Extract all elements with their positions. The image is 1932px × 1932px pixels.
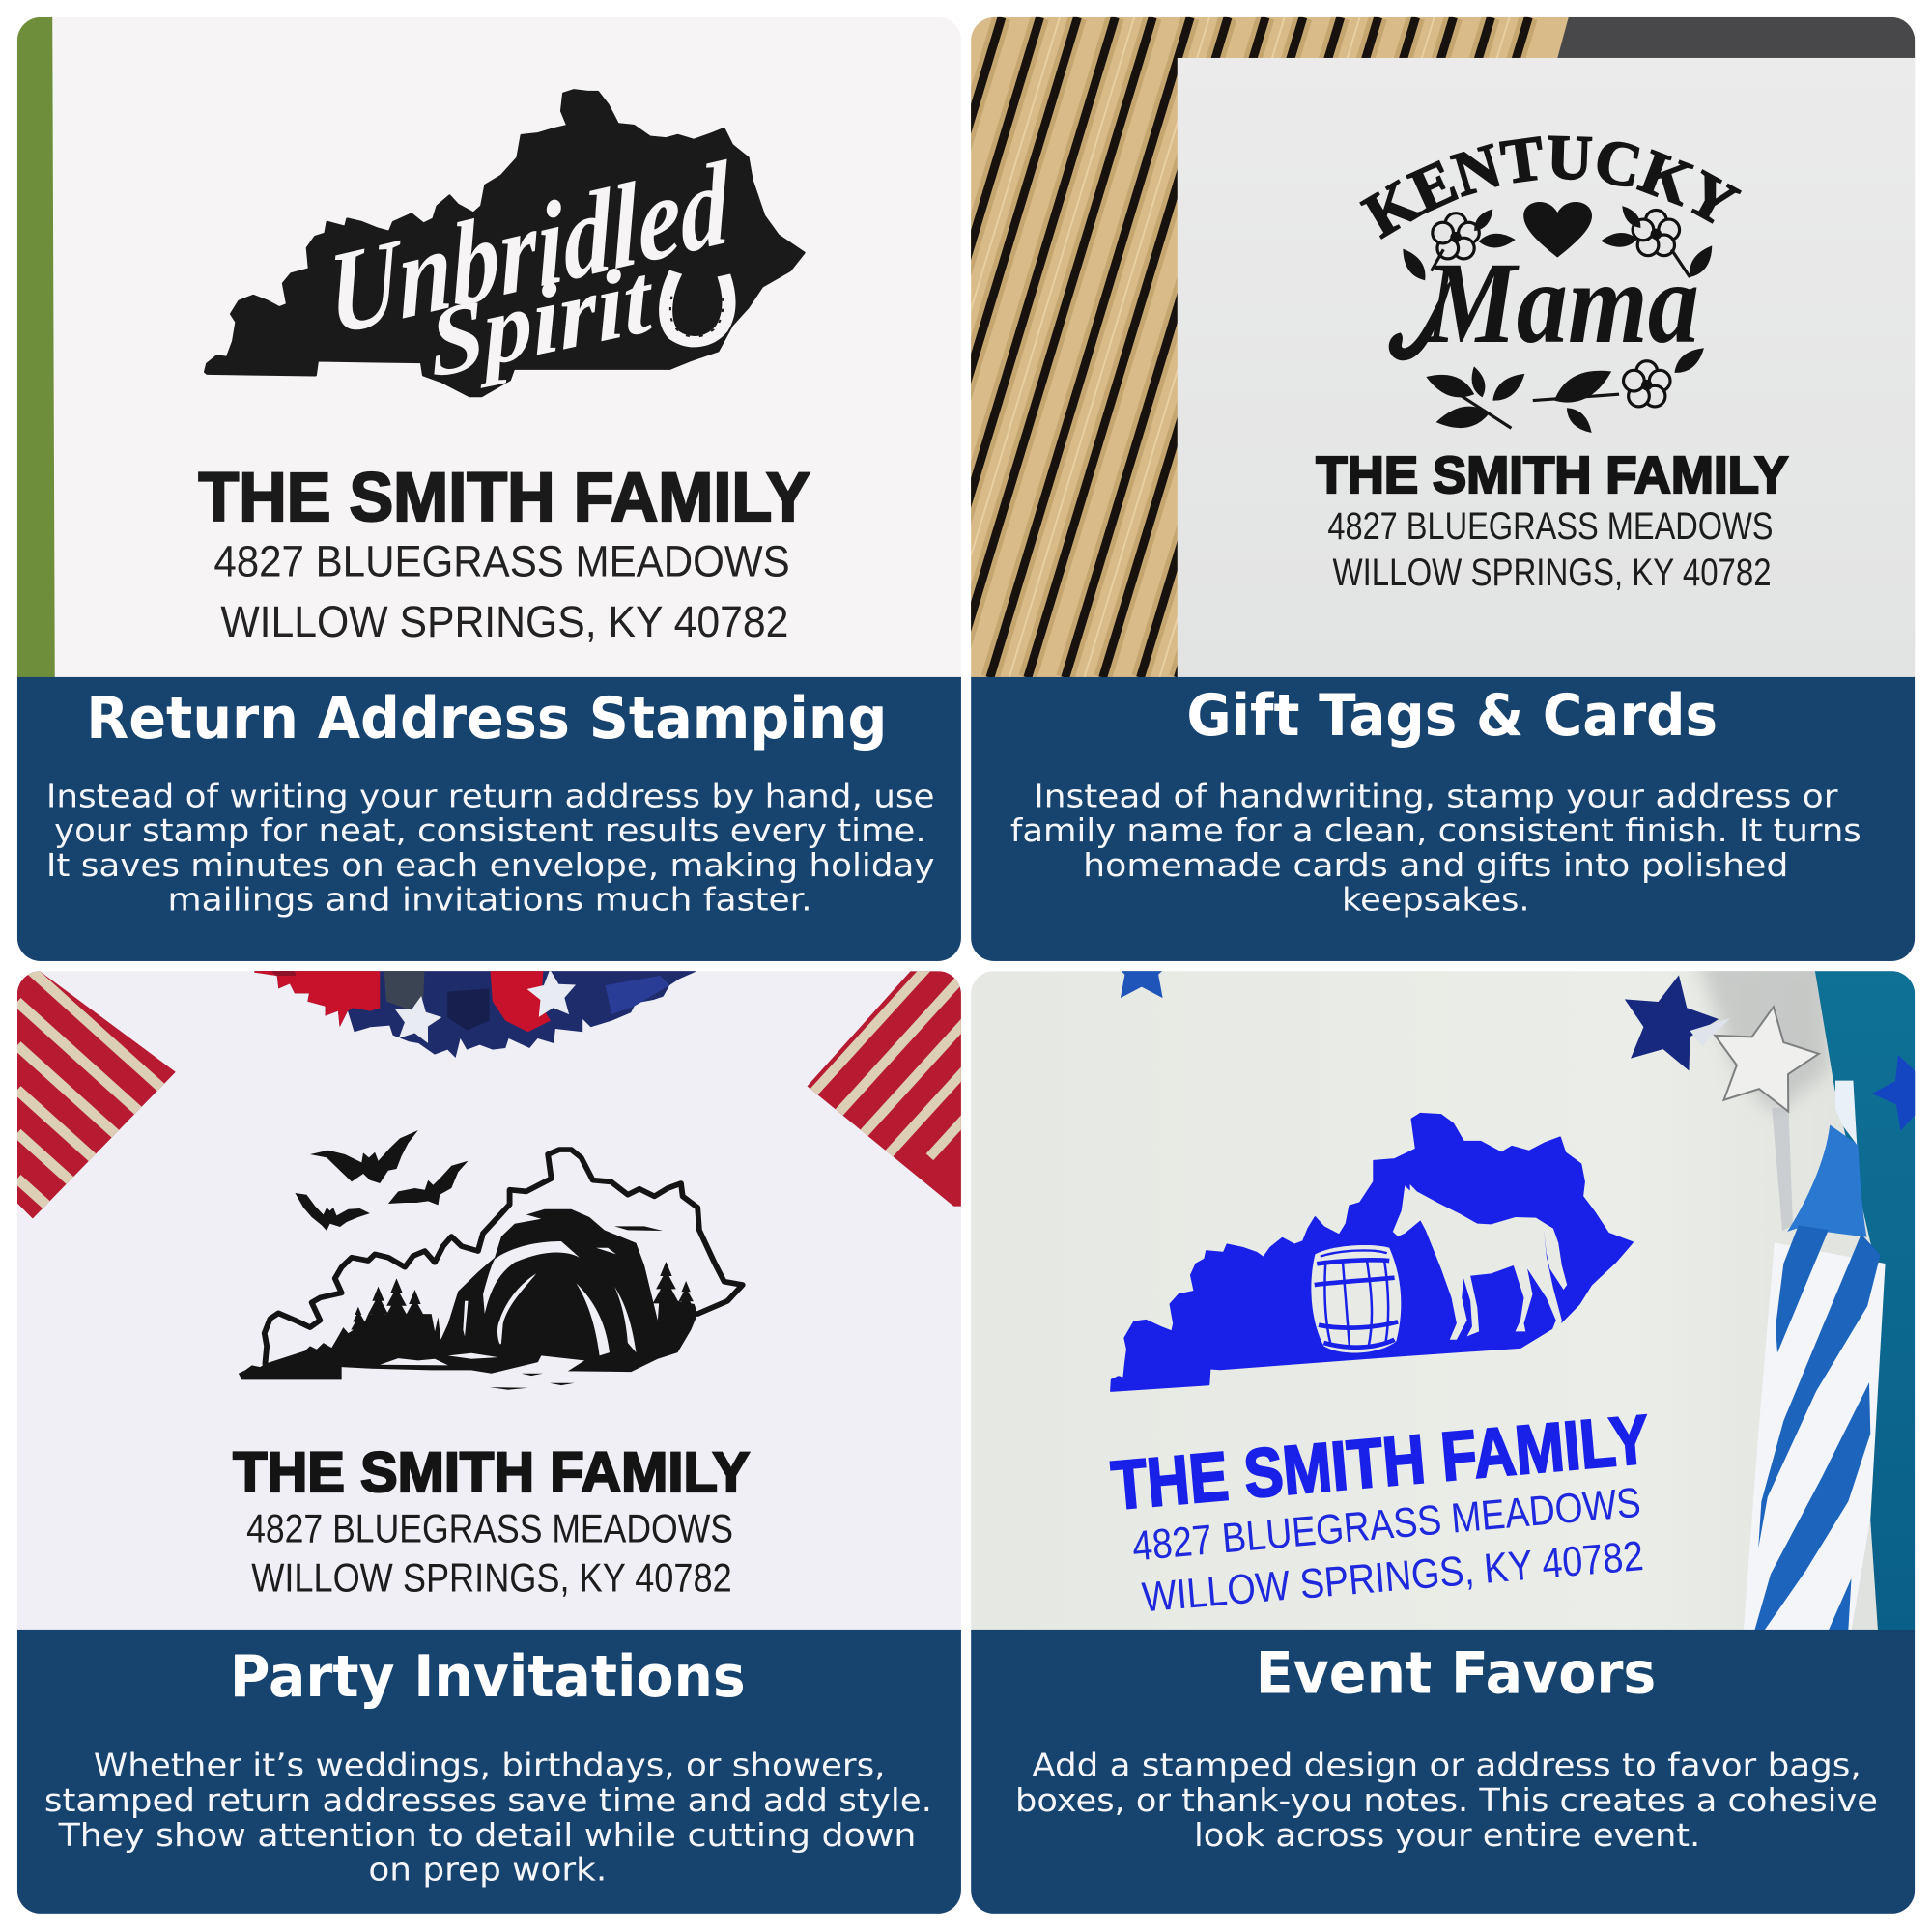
caption band xyxy=(17,1630,961,1914)
water ripples xyxy=(490,1226,663,1390)
body text: your stamp for neat, consistent results every time. xyxy=(54,811,926,849)
striped candle xyxy=(1744,1081,1886,1631)
body text: homemade cards and gifts into polished xyxy=(1083,846,1788,884)
stamp: Kentucky silhouette with Unbridled Spirit: Unbridled xyxy=(326,136,733,361)
body text xyxy=(44,1747,932,1888)
bamboo highlights xyxy=(972,17,1511,677)
stamp: Kentucky Mama design xyxy=(1359,135,1742,433)
body text: stamped return addresses save time and add style. xyxy=(44,1781,932,1819)
bat left xyxy=(295,1193,370,1231)
dark slate background xyxy=(1557,17,1915,58)
body text xyxy=(1015,1747,1878,1854)
flowers and leaves xyxy=(1397,202,1719,438)
stamp: family name: THE SMITH FAMILY xyxy=(198,459,810,536)
blue confetti star right xyxy=(1872,1055,1915,1130)
blue star top left xyxy=(1121,971,1163,999)
stamp: city line: WILLOW SPRINGS, KY 40782 xyxy=(1332,552,1772,594)
dark blue star xyxy=(1625,976,1729,1070)
stamp: city line: WILLOW SPRINGS, KY 40782 xyxy=(251,1554,732,1600)
silver ribbon strip xyxy=(1772,1108,1793,1231)
stamp: Kentucky with horse and barrel xyxy=(1111,1114,1633,1391)
body text: on prep work. xyxy=(368,1850,607,1888)
panel: event favors xyxy=(971,933,1932,1914)
panel: return address stamping xyxy=(17,17,961,961)
caption band xyxy=(971,677,1915,961)
Mama flourish xyxy=(1389,277,1453,360)
body text: Whether it’s weddings, birthdays, or showers, xyxy=(94,1747,886,1784)
body text: Instead of handwriting, stamp your address or xyxy=(1034,778,1838,815)
body text: family name for a clean, consistent finish. It turns xyxy=(1010,811,1861,849)
heading: Party Invitations xyxy=(230,1643,746,1710)
cream strip beside candle xyxy=(1865,1520,1878,1630)
green fabric strip xyxy=(17,17,55,678)
body text: keepsakes. xyxy=(1342,881,1530,919)
stamp: street address: 4827 BLUEGRASS MEADOWS xyxy=(213,536,790,585)
stamp: Kentucky Mama design: KENTUCKY xyxy=(1359,135,1742,240)
body text: Instead of writing your return address by hand, use xyxy=(46,778,935,815)
white textured card xyxy=(1178,58,1915,678)
body text: look across your entire event. xyxy=(1194,1816,1700,1854)
bamboo dark gaps xyxy=(971,17,1532,677)
cave highlights xyxy=(380,1241,636,1365)
stamp: Kentucky silhouette with Unbridled Spirit xyxy=(205,90,804,399)
pine trees xyxy=(351,1262,696,1331)
body text xyxy=(46,778,935,919)
stamp: Kentucky cave with bats xyxy=(239,1130,743,1390)
photo background: white paper xyxy=(17,17,961,678)
caption band xyxy=(971,1630,1915,1914)
heading: Gift Tags & Cards xyxy=(1186,682,1718,749)
heading: Return Address Stamping xyxy=(86,685,887,752)
body text: boxes, or thank-you notes. This creates a cohesive xyxy=(1015,1781,1878,1819)
body text: mailings and invitations much faster. xyxy=(167,881,812,919)
stamp: street address: 4827 BLUEGRASS MEADOWS xyxy=(246,1505,733,1550)
body text: They show attention to detail while cutting down xyxy=(57,1816,916,1854)
body text: It saves minutes on each envelope, making holiday xyxy=(46,846,935,884)
horse xyxy=(1393,1184,1567,1340)
stamp: family name: THE SMITH FAMILY xyxy=(1316,447,1788,504)
teal backdrop xyxy=(1815,971,1915,1631)
panel: party invitations xyxy=(17,971,961,1914)
right striped ribbon xyxy=(808,971,961,1207)
stamp: family name: THE SMITH FAMILY xyxy=(233,1441,750,1504)
photo background: paper xyxy=(971,971,1915,1631)
heading: Event Favors xyxy=(1256,1640,1656,1707)
bat large xyxy=(310,1130,418,1183)
script word Mama: Mama xyxy=(1423,239,1699,368)
bat right xyxy=(388,1161,469,1205)
silver star xyxy=(1713,1005,1821,1113)
stamp: family name: THE SMITH FAMILY xyxy=(1108,1401,1652,1524)
state outline xyxy=(265,1150,743,1364)
stamp: street address: 4827 BLUEGRASS MEADOWS xyxy=(1327,505,1774,548)
ground, forest and cave rock xyxy=(239,1209,697,1379)
left striped ribbon xyxy=(17,971,176,1219)
heart xyxy=(1523,202,1592,258)
panel: gift tags and cards xyxy=(971,17,1915,961)
arched word Kentucky xyxy=(1373,179,1730,245)
patriotic wreath xyxy=(254,971,696,1058)
stamp: Kentucky silhouette with Unbridled Spirit: Spirit xyxy=(426,242,657,399)
stamp: city line: WILLOW SPRINGS, KY 40782 xyxy=(220,597,788,646)
barrel xyxy=(1311,1245,1401,1352)
stamp: city line: WILLOW SPRINGS, KY 40782 xyxy=(1141,1533,1645,1621)
body text xyxy=(1010,778,1861,919)
photo background: bamboo xyxy=(971,17,1915,678)
gray shadow behind stars xyxy=(1696,953,1829,1114)
stamp: street address: 4827 BLUEGRASS MEADOWS xyxy=(1130,1480,1642,1570)
photo background: white surface xyxy=(17,971,961,1631)
caption band xyxy=(17,677,961,961)
body text: Add a stamped design or address to favor bags, xyxy=(1032,1747,1861,1784)
bamboo rod shading xyxy=(971,17,1538,677)
